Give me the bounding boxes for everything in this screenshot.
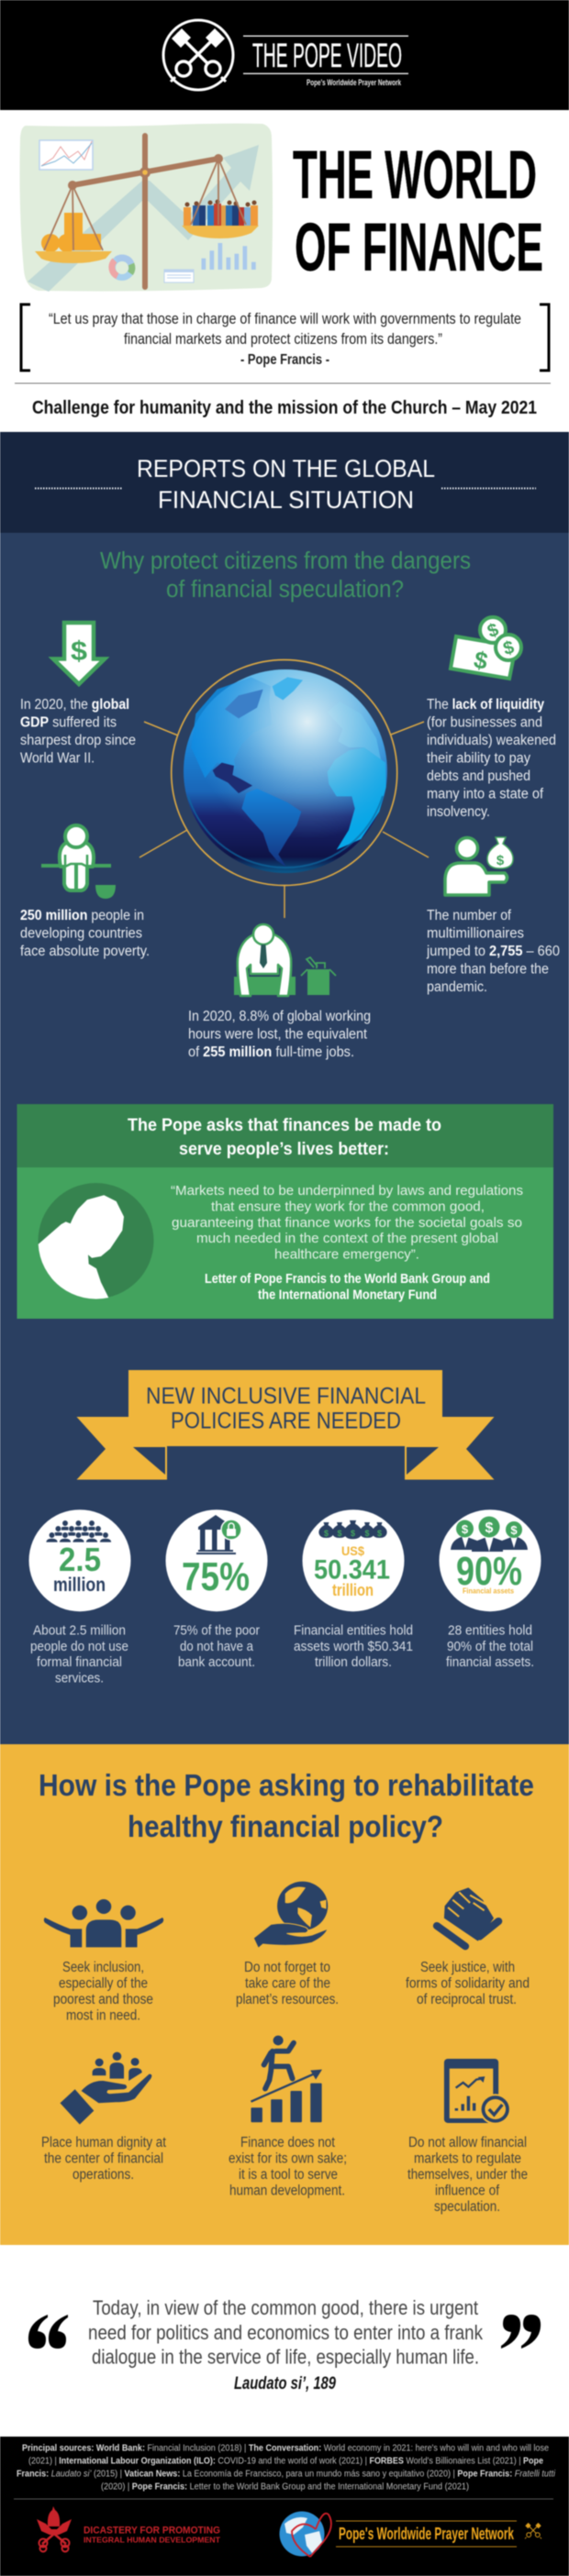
text: global GDP: sharpest drop since <box>20 733 136 748</box>
sources: (2020) | Pope Francis: Letter to the World Bank Group and the International Monetary Fund (2021) <box>101 2482 469 2493</box>
text: global GDP <box>20 697 136 767</box>
letter quote: healthcare emergency”. <box>274 1247 419 1262</box>
logo: Prayer Network globe and heart <box>279 2511 331 2557</box>
text: working hours lost <box>188 1009 371 1060</box>
illustration: balance scale with coins and people <box>20 124 273 292</box>
icon: opening quotation mark <box>28 2315 68 2349</box>
ribbon heading: NEW INCLUSIVE FINANCIAL <box>146 1383 426 1409</box>
icon: small crossed keys <box>525 2523 541 2538</box>
letter attribution: Letter of Pope Francis to the World Bank Group and <box>205 1272 490 1287</box>
text: working hours lost: In 2020, 8.8% of global working <box>188 1009 371 1024</box>
stat: 2.5 million: 2.5 <box>59 1541 101 1578</box>
text: lack of liquidity: their ability to pay <box>427 750 530 767</box>
logo: Dicastery emblem <box>37 2506 72 2551</box>
letter quote: much needed in the context of the present global <box>196 1231 498 1246</box>
captions row 1: most in need. <box>66 2008 140 2023</box>
stat: 50.341 trillion: $ <box>364 1529 370 1538</box>
text: absolute poverty <box>20 908 150 959</box>
letter quote <box>171 1183 523 1262</box>
text: multimillionaires: multimillionaires <box>427 926 524 941</box>
text: multimillionaires: more than before the <box>427 961 549 978</box>
stat: 50.341 trillion: $ <box>337 1529 342 1538</box>
ribbon heading <box>77 1370 494 1480</box>
section header: reports: REPORTS ON THE GLOBAL <box>137 455 435 482</box>
panel heading <box>128 1115 441 1159</box>
stat: 90% <box>439 1509 541 1611</box>
quote: Laudato si': Laudato si’, 189 <box>234 2374 336 2394</box>
captions row 1 <box>53 1960 530 2023</box>
icon: banknote and coins: $ <box>472 646 491 675</box>
text: lack of liquidity <box>427 697 556 820</box>
stat: 50.341 trillion: $ <box>377 1529 382 1538</box>
logo text: Dicastery: DICASTERY FOR PROMOTING <box>84 2526 220 2537</box>
logo wordmark: Pope's Worldwide Prayer Network <box>307 78 401 88</box>
sources: Principal sources: World Bank: Financial Inclusion (2018) | The Conversation: World economy in 2021: here's who will win and who will lose <box>22 2443 550 2454</box>
text: global GDP: GDP suffered its <box>20 715 117 730</box>
icon: poor seated person with bowl <box>41 825 116 899</box>
captions row 2: Do not allow financial <box>408 2135 527 2150</box>
stat: 75% <box>165 1509 268 1611</box>
captions row 2: influence of <box>435 2183 500 2199</box>
subheading: why protect: of financial speculation? <box>166 577 404 603</box>
icon: down arrow with dollar: $ <box>71 636 87 667</box>
stat: 90%: Financial assets <box>463 1587 514 1596</box>
text: lack of liquidity: individuals) weakened <box>427 733 556 748</box>
text: absolute poverty: developing countries <box>20 926 142 941</box>
icon: suited men with dollar heads: $ <box>485 1520 494 1536</box>
icon: banknote and coins: $ <box>501 637 516 659</box>
text: multimillionaires <box>426 908 560 995</box>
title <box>293 137 543 285</box>
captions row 1: take care of the <box>245 1975 330 1992</box>
stat: 50.341 trillion: US$ <box>341 1543 364 1558</box>
captions row 2: operations. <box>73 2167 134 2183</box>
section header: reports <box>0 432 569 533</box>
letter quote: guaranteeing that finance works for the societal goals so <box>172 1215 522 1231</box>
stat: 2.5 million: million <box>53 1575 106 1596</box>
text: global GDP: In 2020, the global <box>20 697 129 713</box>
stat: 90%: 90% <box>456 1549 522 1594</box>
letter attribution <box>205 1272 490 1302</box>
captions row 1: poorest and those <box>53 1992 153 2007</box>
yellow panel heading: healthy financial policy? <box>128 1809 443 1843</box>
icon: down arrow with dollar <box>53 623 105 684</box>
connector lines <box>139 722 429 918</box>
captions row 1: Seek inclusion, <box>62 1960 144 1975</box>
stat captions: 90% of the total <box>447 1639 533 1654</box>
text: lack of liquidity: insolvency. <box>427 804 490 820</box>
logo wordmark <box>243 35 408 88</box>
text: absolute poverty: 250 million people in <box>20 908 144 923</box>
icon: people with open arms <box>44 1899 163 1947</box>
ribbon heading: POLICIES ARE NEEDED <box>171 1409 401 1434</box>
icon: banknote and coins <box>451 617 521 679</box>
captions row 2: themselves, under the <box>407 2167 528 2183</box>
icon: crowd <box>46 1520 112 1542</box>
captions row 2: Finance does not <box>240 2135 336 2150</box>
icon: banknote and coins: $ <box>485 620 501 642</box>
stat captions: 28 entities hold <box>448 1623 532 1638</box>
stat captions: do not have a <box>180 1639 254 1654</box>
captions row 2 <box>41 2135 528 2215</box>
captions row 2: human development. <box>229 2183 345 2199</box>
stat captions: services. <box>55 1671 104 1686</box>
quote: Laudato si': dialogue in the service of life, especially human life. <box>92 2346 479 2368</box>
text: working hours lost: hours were lost, the equivalent <box>188 1027 368 1042</box>
text: lack of liquidity: many into a state of <box>427 787 544 802</box>
sources: (2021) | International Labour Organization (ILO): COVID-19 and the world of work (2021) | FORBES World's Billionaires List (2021) | Pope <box>28 2456 544 2467</box>
quote block with brackets: - Pope Francis - <box>240 352 329 368</box>
sources <box>17 2443 556 2493</box>
quote: Laudato si': need for politics and economics to enter into a frank <box>88 2321 484 2344</box>
logo wordmark: THE POPE VIDEO <box>252 37 402 74</box>
captions row 2: exist for its own sake; <box>229 2151 347 2166</box>
text: global GDP: World War II. <box>20 750 95 767</box>
stat: 50.341 trillion: trillion <box>332 1581 374 1599</box>
stat captions: assets worth $50.341 <box>294 1639 413 1654</box>
icon: hand holding people <box>60 2052 151 2125</box>
icon: Pope Video crossed keys logo <box>163 20 233 90</box>
text: lack of liquidity: The lack of liquidity <box>427 697 544 713</box>
icon: suited men with dollar heads: $ <box>510 1523 518 1537</box>
subheading: why protect <box>100 548 471 603</box>
footer <box>0 2437 569 2576</box>
logo text: Dicastery <box>84 2526 221 2544</box>
stat captions: financial assets. <box>446 1654 534 1670</box>
icon: millionaire with money bag: $ <box>496 853 505 868</box>
quote block with brackets: financial markets and protect citizens from its dangers.” <box>124 331 442 348</box>
stat: 50.341 trillion: 50.341 <box>314 1555 390 1585</box>
stat captions: Financial entities hold <box>294 1623 413 1638</box>
text: multimillionaires: The number of <box>427 908 512 923</box>
letter attribution: the International Monetary Fund <box>258 1288 437 1302</box>
text: lack of liquidity: (for businesses and <box>427 715 542 730</box>
quote block with brackets <box>21 304 549 370</box>
captions row 2: speculation. <box>434 2199 500 2215</box>
stat captions: formal financial <box>37 1654 122 1670</box>
header band <box>0 0 569 110</box>
icon: tablet with chart and check <box>444 2059 511 2125</box>
stat: 2.5 million <box>29 1509 130 1611</box>
stat: 50.341 trillion: $ <box>324 1529 329 1538</box>
text: multimillionaires: pandemic. <box>427 979 487 995</box>
panel heading: The Pope asks that finances be made to <box>128 1115 441 1135</box>
icon: closing quotation mark <box>501 2315 541 2349</box>
captions row 1: Do not forget to <box>244 1960 330 1975</box>
captions row 1: especially of the <box>59 1975 148 1992</box>
panel: how is the Pope asking <box>0 1744 569 2245</box>
captions row 1: Seek justice, with <box>420 1960 515 1975</box>
icon: handshake <box>437 1887 498 1946</box>
captions row 2: the center of financial <box>44 2151 163 2166</box>
sources: Francis: Laudato si’ (2015) | Vatican News: La Economía de Francisco, para un mundo más sano y equitativo (2020) | Pope Francis: Fratelli tutti <box>17 2469 556 2480</box>
icon: person climbing bar chart <box>251 2036 322 2122</box>
captions row 1: of reciprocal trust. <box>417 1992 517 2007</box>
quote: Laudato si' <box>28 2296 541 2394</box>
stat: 50.341 trillion: $ <box>351 1529 355 1538</box>
panel: Pope's letter <box>17 1104 553 1319</box>
stat captions: About 2.5 million <box>33 1623 126 1638</box>
stat captions: 75% of the poor <box>173 1623 260 1638</box>
yellow panel heading <box>39 1768 534 1843</box>
letter quote: that ensure they work for the common good, <box>211 1200 485 1214</box>
stat: 75%: 75% <box>182 1554 250 1599</box>
subheading: why protect: Why protect citizens from the dangers <box>100 548 471 574</box>
letter quote: “Markets need to be underpinned by laws and regulations <box>171 1183 523 1199</box>
icon: money bags <box>318 1520 387 1539</box>
icon: unemployed worker with box <box>234 924 336 996</box>
quote: Laudato si': Today, in view of the common good, there is urgent <box>93 2296 478 2319</box>
icon: suited men with dollar heads <box>451 1517 528 1552</box>
text: lack of liquidity: debts and pushed <box>427 768 530 784</box>
captions row 1: forms of solidarity and <box>406 1975 530 1992</box>
captions row 2: it is a tool to serve <box>239 2167 338 2183</box>
captions row 2: Place human dignity at <box>41 2135 167 2150</box>
section header: reports: FINANCIAL SITUATION <box>158 486 414 514</box>
stat captions: bank account. <box>178 1654 255 1670</box>
section background: navy <box>0 432 569 1744</box>
icon: hand holding globe <box>253 1882 328 1948</box>
stat captions: trillion dollars. <box>315 1654 392 1670</box>
yellow panel heading: How is the Pope asking to rehabilitate <box>39 1768 534 1802</box>
icon: millionaire with money bag <box>445 837 513 895</box>
stat captions: people do not use <box>30 1639 128 1654</box>
captions row 2: markets to regulate <box>414 2151 521 2166</box>
stat captions <box>30 1623 534 1686</box>
logo text: Dicastery: INTEGRAL HUMAN DEVELOPMENT <box>84 2535 221 2544</box>
icon: Pope silhouette <box>39 1183 154 1299</box>
globe <box>172 660 397 886</box>
text: absolute poverty: face absolute poverty. <box>20 944 150 959</box>
text: multimillionaires: jumped to 2,755 – 660 <box>426 944 560 959</box>
stat: 50.341 trillion <box>303 1509 404 1611</box>
icon: suited men with dollar heads: $ <box>462 1522 469 1536</box>
text: working hours lost: of 255 million full-time jobs. <box>188 1045 354 1060</box>
captions row 1: planet’s resources. <box>236 1992 339 2007</box>
panel heading: serve people’s lives better: <box>179 1139 389 1159</box>
icon: bank with lock <box>196 1515 241 1554</box>
